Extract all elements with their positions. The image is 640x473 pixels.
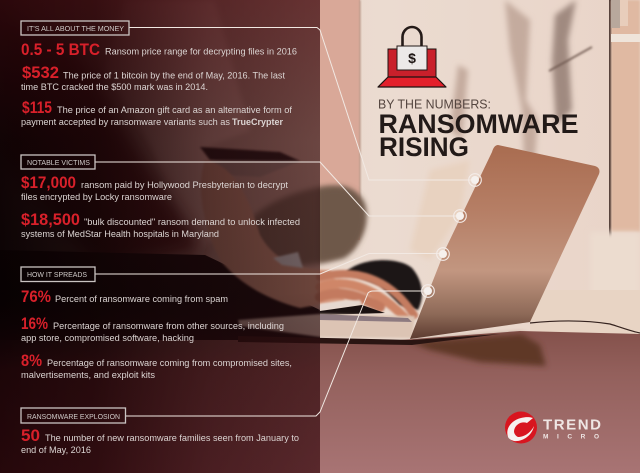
forearm: [201, 160, 345, 308]
dark below hand: [320, 305, 385, 315]
stat: gift card: TrueCrypter: [232, 117, 284, 127]
heading: victims: NOTABLE VICTIMS: [27, 158, 90, 167]
panel: ransomware explosion: [21, 408, 299, 455]
person's shirt: [105, 0, 250, 255]
stat: BTC range: 0.5 - 5 BTC: [21, 41, 100, 59]
stat: compromised sites: [21, 352, 292, 380]
heading: victims: [21, 155, 95, 169]
logo: Trend Micro: MICRO: [543, 434, 599, 440]
stat: other sources: [21, 315, 284, 343]
stat: MedStar: $18,500: [21, 211, 80, 229]
stat: bitcoin price: $532: [22, 64, 59, 82]
hand and fingers: [320, 274, 414, 318]
stat: MedStar: "bulk discounted" ransom demand to unlock infected: [84, 217, 300, 227]
stat: bitcoin price: [21, 64, 286, 92]
callout dots: [422, 174, 481, 297]
tablet: [200, 147, 300, 165]
stat: compromised sites: 8%: [21, 352, 42, 370]
heading: spreads: HOW IT SPREADS: [27, 270, 87, 279]
overlay: dark left panel: [0, 0, 320, 473]
title: [378, 96, 578, 162]
stat: bitcoin price: time BTC cracked the $500 mark was in 2014.: [21, 82, 208, 92]
stat: compromised sites: Percentage of ransomware coming from compromised sites,: [47, 358, 292, 368]
stat: spam: 76%: [21, 288, 51, 306]
stat: Hollywood Presbyterian: files encrypted by Locky ransomware: [21, 192, 172, 202]
stat: BTC range: Ransom price range for decrypting files in 2016: [105, 46, 297, 56]
title: RISING: [379, 132, 469, 162]
stat: new families: 50: [21, 427, 40, 445]
panel: it's all about the money: [21, 21, 297, 127]
stat: new families: [21, 427, 299, 455]
stat: gift card: [21, 99, 293, 127]
stat: Hollywood Presbyterian: $17,000: [21, 174, 76, 192]
table: [0, 331, 640, 473]
stat: MedStar: systems of MedStar Health hospitals in Maryland: [21, 229, 219, 239]
second person's sleeve: [0, 20, 205, 270]
logo: Trend Micro: [505, 412, 601, 444]
heading: spreads: [21, 267, 95, 282]
logo: Trend Micro: TREND: [543, 416, 601, 434]
connector lines: [95, 28, 475, 416]
icon: laptop with dollar padlock: [378, 27, 446, 87]
heading: money: [21, 21, 129, 35]
stat: other sources: 16%: [21, 315, 48, 333]
stat: new families: end of May, 2016: [21, 445, 91, 455]
title: BY THE NUMBERS:: [378, 96, 491, 112]
paper under palm: [320, 300, 362, 311]
panel: how it spreads: [21, 267, 292, 380]
stat: Hollywood Presbyterian: ransom paid by Hollywood Presbyterian to decrypt: [81, 180, 289, 190]
stat: other sources: app store, compromised software, hacking: [21, 333, 194, 343]
heading: explosion: [21, 408, 126, 423]
stat: other sources: Percentage of ransomware from other sources, including: [53, 321, 284, 331]
stat: gift card: $115: [22, 99, 52, 117]
cuff: [273, 252, 303, 268]
heading: money: IT'S ALL ABOUT THE MONEY: [27, 24, 124, 33]
stat: new families: The number of new ransomware families seen from January to: [45, 433, 299, 443]
table shadow under laptop: [410, 334, 546, 366]
icon: laptop with dollar padlock: $: [408, 50, 416, 66]
hair: [346, 260, 422, 310]
title: RANSOMWARE: [378, 109, 578, 139]
stat: compromised sites: malvertisements, and exploit kits: [21, 370, 156, 380]
stat: gift card: payment accepted by ransomware variants such as: [21, 117, 231, 127]
laptop lid: [410, 145, 600, 339]
panel: notable victims: [21, 155, 300, 239]
stat: BTC range: [21, 41, 297, 59]
stat: Hollywood Presbyterian: [21, 174, 289, 202]
hoodie: part right of the panel edge: [318, 187, 366, 262]
stat: bitcoin price: The price of 1 bitcoin by the end of May, 2016. The last: [63, 70, 286, 80]
heading: explosion: RANSOMWARE EXPLOSION: [27, 412, 120, 421]
stat: gift card: The price of an Amazon gift card as an alternative form of: [57, 105, 293, 115]
stat: spam: [21, 288, 228, 306]
laptop base: [238, 314, 415, 338]
dark lower band: [0, 250, 320, 340]
stat: MedStar: [21, 211, 300, 239]
hoodie: [248, 186, 365, 266]
stat: spam: Percent of ransomware coming from spam: [55, 294, 228, 304]
